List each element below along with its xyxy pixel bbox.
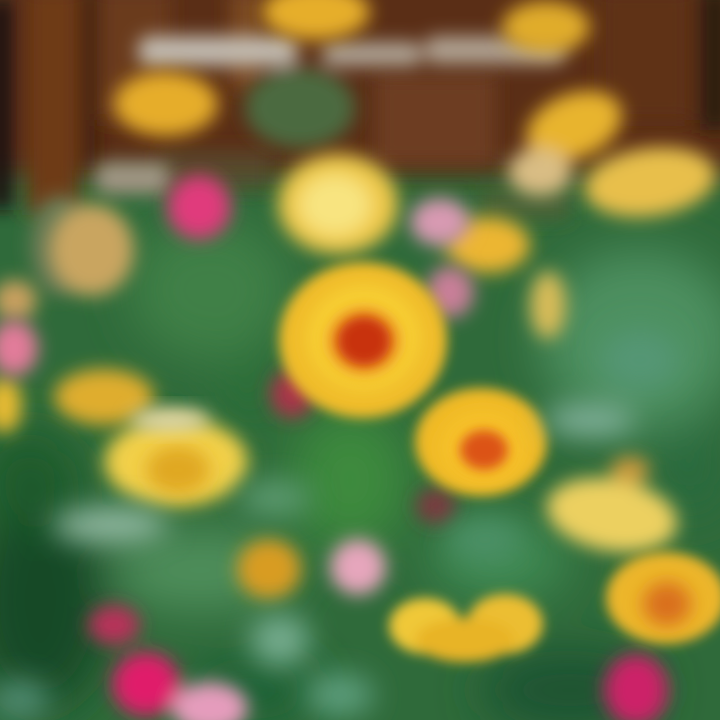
flowers: pink blooms: [0, 175, 668, 720]
background: pale fence rail: [30, 36, 565, 295]
flower: small orange: [237, 539, 301, 599]
flower: right sunflower: [415, 388, 547, 496]
background: wooden fence: [0, 0, 720, 220]
flower: bottom center yellow: [389, 594, 543, 662]
flowers: top row yellow: [0, 0, 720, 433]
foliage: pale leaf highlights: [0, 330, 680, 720]
flower: bottom right sunflower: [606, 552, 720, 644]
flower: lower right yellow: [541, 456, 683, 562]
flower: lower left yellow: [104, 408, 248, 506]
flower: large central sunflower: [279, 262, 447, 418]
